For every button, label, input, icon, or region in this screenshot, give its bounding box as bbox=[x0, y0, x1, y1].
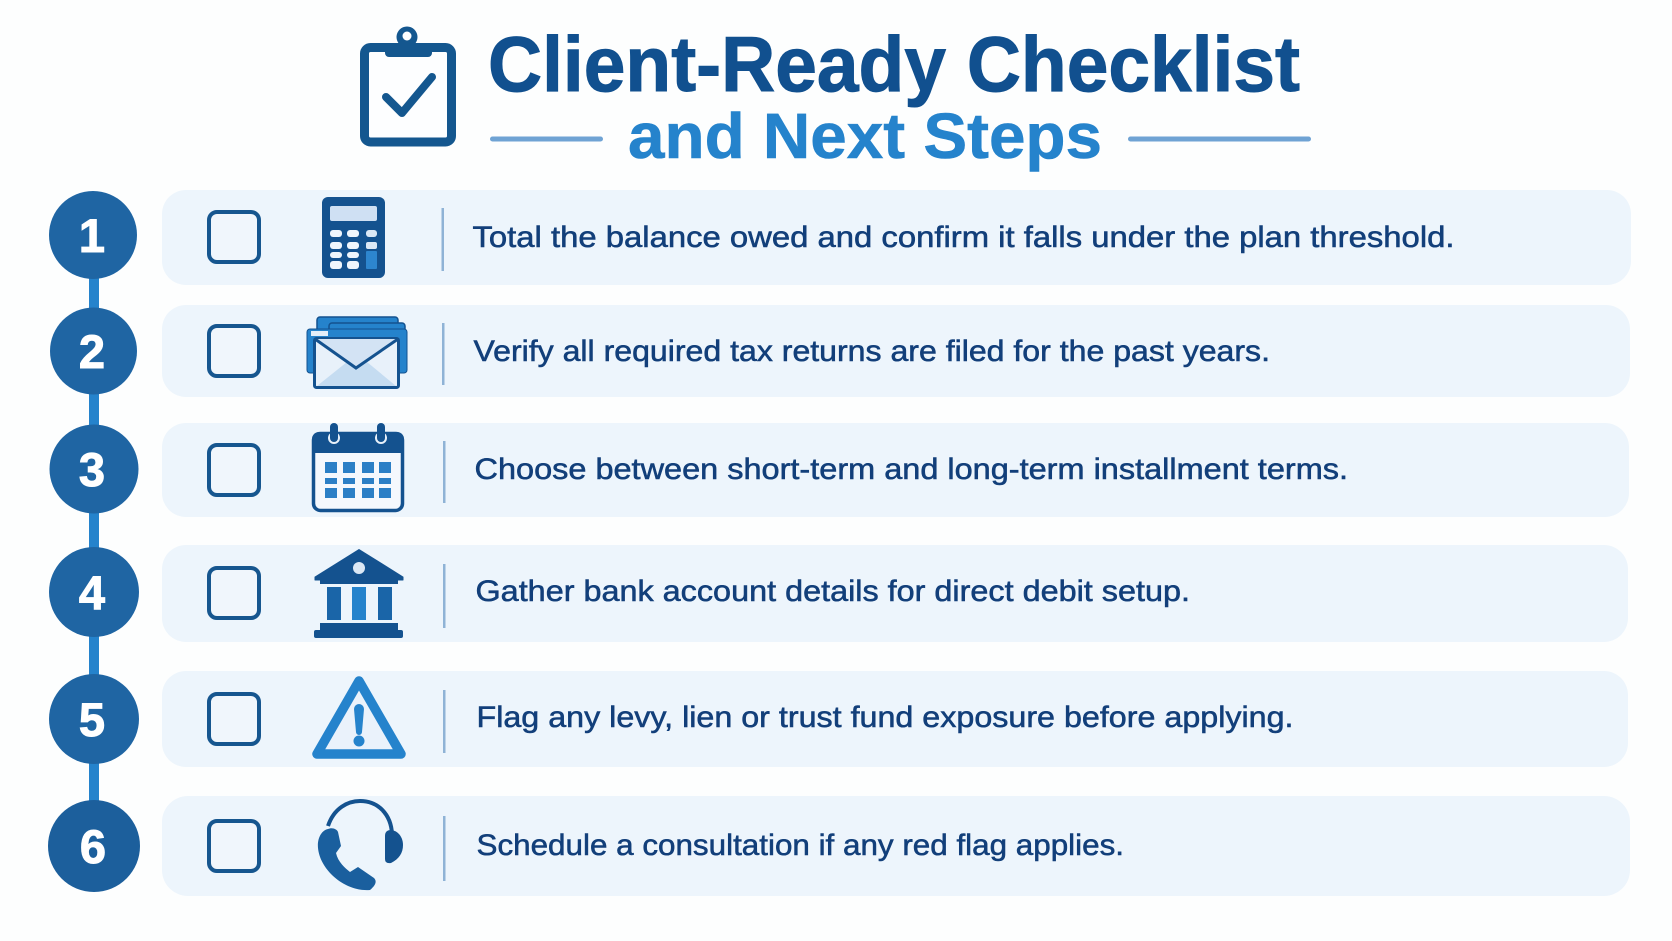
icon: envelopes bbox=[307, 317, 407, 388]
step number 3: 3 bbox=[79, 443, 105, 496]
checkbox 6 bbox=[209, 821, 259, 871]
title: Client-Ready Checklist bbox=[488, 20, 1300, 108]
divider 6 bbox=[443, 816, 446, 881]
panel: step 1 bbox=[162, 190, 1631, 285]
step number 4: 4 bbox=[79, 566, 105, 619]
step number 1: 1 bbox=[79, 209, 105, 262]
checkbox 3 bbox=[209, 445, 259, 495]
divider 1 bbox=[442, 208, 444, 271]
step number 5 bbox=[49, 674, 139, 764]
panel: step 5 bbox=[162, 671, 1628, 767]
checkbox 4 bbox=[209, 568, 259, 618]
panel: step 6 bbox=[162, 796, 1630, 896]
divider 5 bbox=[443, 690, 446, 753]
icon: calendar bbox=[312, 423, 404, 510]
checkbox 2 bbox=[209, 326, 259, 376]
step 4 text: Gather bank account details for direct debit setup. bbox=[476, 575, 1190, 608]
divider 3 bbox=[443, 441, 446, 503]
step number 2 bbox=[50, 308, 137, 394]
step number 6: 6 bbox=[80, 820, 106, 873]
step number 2: 2 bbox=[79, 325, 105, 378]
subtitle rule: right bbox=[1128, 136, 1311, 142]
icon: headset with phone bbox=[318, 801, 403, 890]
step 5 text: Flag any levy, lien or trust fund exposure before applying. bbox=[476, 701, 1294, 734]
checkbox 5 bbox=[209, 694, 259, 744]
icon: clipboard with checkmark bbox=[364, 26, 452, 142]
checkbox 1 bbox=[209, 212, 259, 262]
subtitle rule: left bbox=[490, 136, 603, 142]
icon: warning triangle bbox=[317, 681, 401, 754]
icon: bank bbox=[314, 550, 403, 638]
step number 3 bbox=[50, 424, 138, 514]
step number 5: 5 bbox=[79, 693, 105, 746]
step 1 text: Total the balance owed and confirm it falls under the plan threshold. bbox=[472, 221, 1454, 254]
step 2 text: Verify all required tax returns are filed for the past years. bbox=[474, 335, 1270, 368]
panel: step 2 bbox=[162, 305, 1630, 397]
panel: step 3 bbox=[162, 423, 1629, 517]
subtitle: and Next Steps bbox=[628, 100, 1102, 172]
divider 4 bbox=[443, 564, 446, 628]
icon: calculator bbox=[322, 197, 385, 278]
divider 2 bbox=[442, 323, 444, 385]
step 3 text: Choose between short-term and long-term installment terms. bbox=[474, 453, 1348, 486]
panel: step 4 bbox=[162, 545, 1628, 642]
step 6 text: Schedule a consultation if any red flag applies. bbox=[476, 829, 1124, 862]
step number 1 bbox=[49, 191, 137, 279]
timeline connector bbox=[89, 270, 99, 820]
step number 6 bbox=[48, 800, 140, 892]
step number 4 bbox=[49, 547, 139, 637]
